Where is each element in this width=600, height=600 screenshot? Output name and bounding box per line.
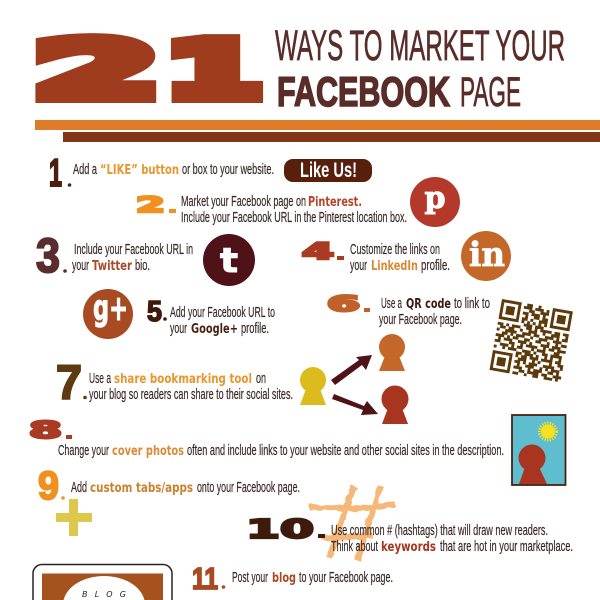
item 5 text: profile.: [241, 320, 269, 337]
item 6 text: your Facebook page.: [379, 311, 462, 328]
icon: blog: BLOG: [82, 590, 126, 599]
item 4 text: [350, 241, 450, 274]
item 11 text: blog: [272, 571, 296, 586]
item 9 number: 9: [38, 464, 59, 508]
item 8 number: [29, 418, 72, 444]
item 10 text: [331, 522, 573, 555]
item 1 text: or box to your website.: [182, 161, 274, 178]
item 8 text: [58, 442, 504, 459]
icon: pinterest: [410, 177, 460, 227]
item 11 text: [232, 569, 393, 586]
title: ways to market your facebook page: FACEBOOK: [277, 68, 450, 115]
title: ways to market your facebook page: [275, 22, 565, 115]
orange header bar: [35, 120, 600, 130]
item 6 number: 6: [327, 292, 360, 316]
icon: yellow person: [300, 367, 326, 405]
icon: tumblr t: t: [220, 241, 238, 281]
item 10 number: 10: [246, 515, 314, 545]
icon: red person: [382, 386, 408, 424]
item 8 text: Change your: [58, 442, 109, 459]
item 11 text: Post your: [232, 569, 268, 586]
item 5 text: Google+: [191, 322, 238, 337]
icon: google plus: [83, 289, 133, 339]
item 6 text: to link to: [454, 295, 490, 312]
item 4 text: your: [350, 257, 367, 274]
item 1 text: Add a: [73, 161, 97, 178]
item 2 number: [136, 193, 176, 217]
item 9 text: onto your Facebook page.: [197, 479, 300, 496]
item 7 text: share bookmarking tool: [114, 372, 252, 387]
icon: linkedin: [461, 231, 511, 281]
item 4 text: profile.: [421, 257, 450, 274]
item 9 text: custom tabs/apps: [90, 481, 193, 496]
item 9 text: [71, 479, 300, 496]
title: big 21: 1: [166, 26, 262, 116]
item 11 number: 11: [192, 561, 218, 596]
item 8 number: 8: [29, 418, 62, 444]
like us button: Like Us!: [300, 159, 357, 182]
item 4 number: 4: [302, 240, 334, 265]
icon: plus: [56, 499, 92, 536]
arrow: to red person: [332, 394, 378, 415]
item 5 text: [170, 304, 275, 337]
item 9 text: Add: [71, 479, 87, 496]
item 2 text: Include your Facebook URL in the Pinterest location box.: [181, 209, 407, 226]
icon: google plus: g+: [93, 289, 128, 329]
item 10 text: Think about: [331, 538, 378, 555]
item 6 text: Use a: [381, 295, 402, 312]
item 3 text: [72, 241, 193, 274]
icon: blog: [33, 564, 172, 600]
item 5 number: 5: [147, 296, 162, 328]
item 8 text: cover photos: [112, 444, 184, 459]
item 7 text: on: [256, 370, 266, 387]
item 7 text: your blog so readers can share to their social sites.: [89, 386, 293, 403]
item 3 text: Include your Facebook URL in: [74, 241, 193, 258]
item 6 text: QR code: [406, 297, 451, 312]
item 7 number: 7: [56, 357, 82, 410]
title: ways to market your facebook page: PAGE: [460, 68, 521, 115]
item 1 text: “LIKE” button: [100, 163, 179, 178]
item 6 text: [379, 295, 490, 328]
item 11 text: to your Facebook page.: [299, 569, 393, 586]
item 3 text: your: [72, 257, 89, 274]
item 6 number: [327, 292, 370, 316]
brown header bar: [63, 132, 600, 142]
icon: linkedin: in: [469, 235, 505, 275]
icon: cover photo: [512, 415, 566, 485]
item 2 text: Pinterest.: [308, 195, 362, 210]
item 7 text: Use a: [89, 370, 111, 387]
item 5 text: your: [170, 320, 187, 337]
item 3 text: Twitter: [92, 259, 132, 274]
item 2 text: Market your Facebook page on: [181, 193, 306, 210]
item 1 text: [73, 161, 274, 178]
item 3 text: bio.: [135, 257, 150, 274]
item 10 text: keywords: [381, 540, 436, 555]
item 2 number: 2: [136, 193, 165, 217]
title: big 21: 2: [35, 26, 158, 116]
icon: hashtag: [309, 486, 395, 560]
arrow: to orange person: [331, 355, 372, 385]
icon: pinterest: p: [425, 181, 445, 216]
item 4 text: LinkedIn: [371, 259, 418, 274]
item 4 number: [302, 240, 344, 265]
item 10 number: [246, 515, 325, 545]
icon: qr code: [490, 300, 573, 381]
icon: tumblr t: [203, 234, 255, 286]
item 4 text: Customize the links on: [350, 241, 440, 258]
item 3 number: 3: [36, 230, 60, 283]
item 2 text: [181, 193, 407, 226]
item 5 text: Add your Facebook URL to: [170, 304, 275, 321]
item 7 text: [89, 370, 293, 403]
title: big 21: [35, 26, 262, 116]
icon: orange person: [379, 334, 405, 371]
item 1 number: 1: [49, 152, 62, 195]
